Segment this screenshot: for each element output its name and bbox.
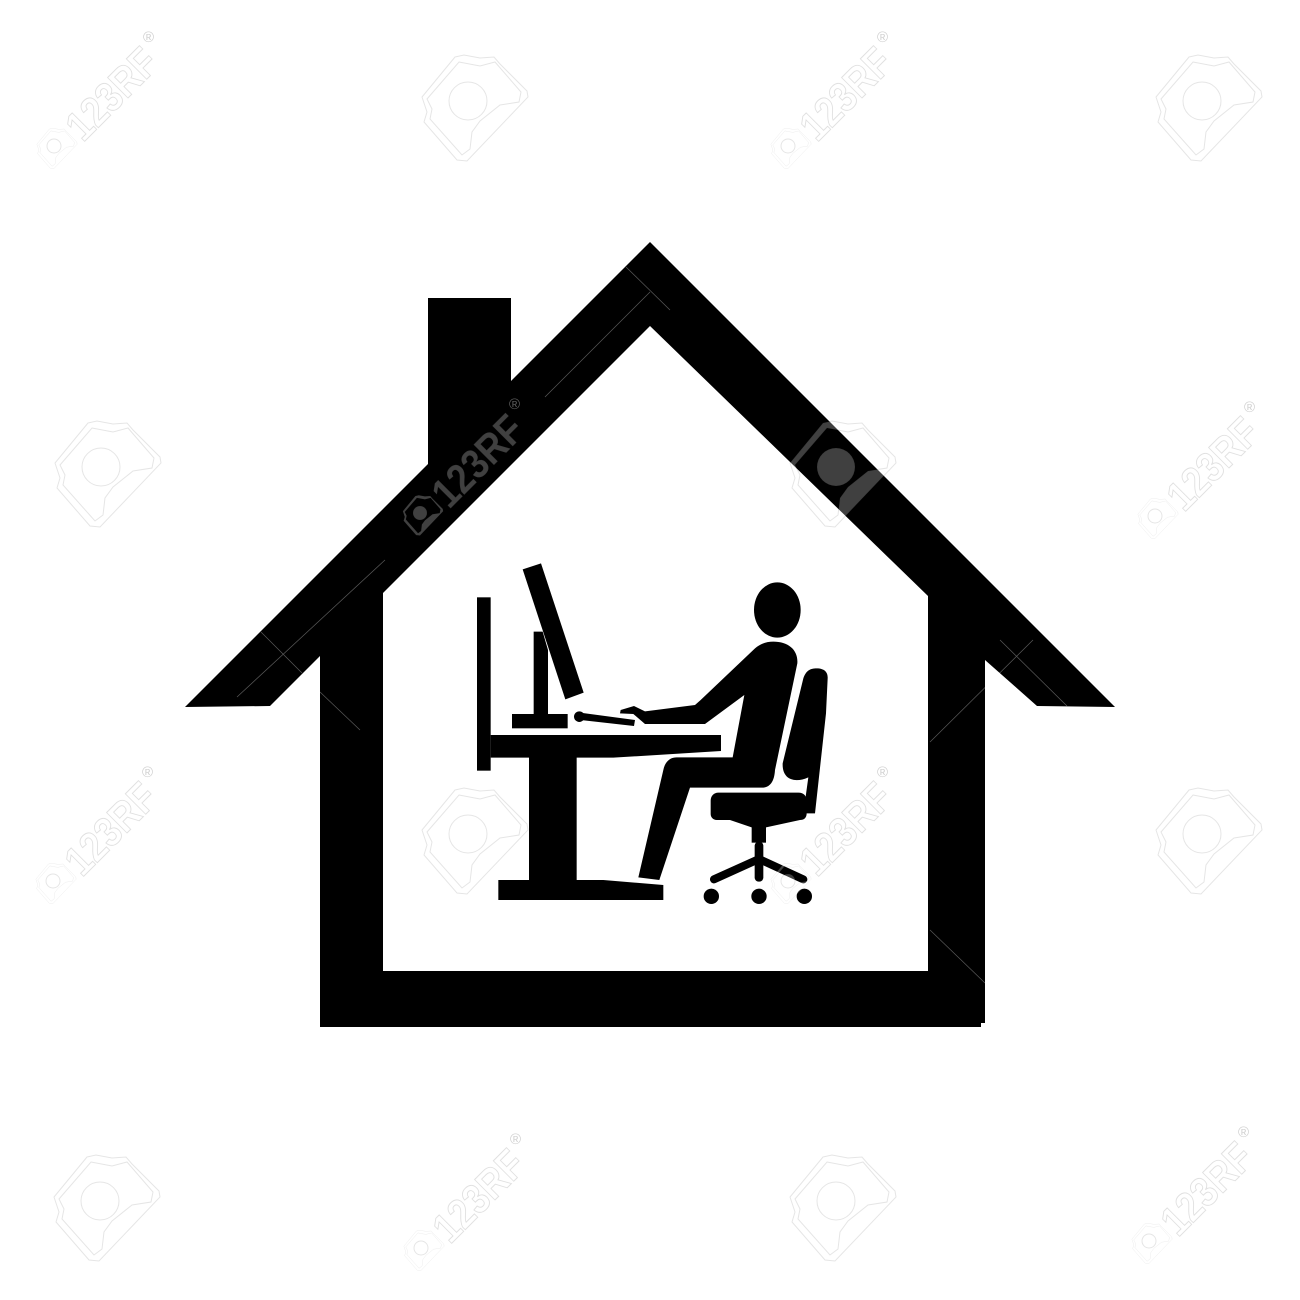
watermark: egg row 1: [422, 55, 528, 161]
person body: [620, 642, 797, 880]
watermark: logo row 3 right: ®: [877, 764, 888, 781]
watermark: logo row 3 left: [36, 764, 166, 904]
watermark: logo row 4 far right: 123RF: [1151, 1133, 1262, 1244]
watermark: logo row 2 right: 123RF: [1157, 408, 1268, 519]
watermark: logo on roof: ®: [509, 396, 520, 413]
watermark: egg row 3: [422, 788, 528, 894]
icon: house outline with chimney: [185, 242, 1115, 1027]
watermark: logo row 4 far right: [1132, 1124, 1262, 1264]
watermark: logo on roof: [403, 396, 533, 536]
watermark: logo row 1 left: [37, 29, 167, 169]
watermark: logo row 2 right: [1138, 399, 1268, 539]
office chair: [704, 668, 828, 904]
watermark: logo row 4 middle: 123RF: [423, 1140, 534, 1251]
watermark: logo row 1 right: [771, 29, 901, 169]
desk: [477, 597, 721, 900]
computer monitor: [512, 563, 584, 728]
watermark: egg on roof right: [790, 421, 896, 527]
person head: [754, 582, 801, 638]
watermark: egg row 3 far right: [1156, 788, 1262, 894]
watermark: egg row 2 left: [55, 421, 161, 527]
watermark: logo row 4 middle: ®: [510, 1131, 521, 1148]
watermark: logo row 3 right: 123RF: [790, 773, 901, 884]
watermark: logo row 4 far right: ®: [1238, 1124, 1249, 1141]
watermark: logo row 1 right: 123RF: [790, 38, 901, 149]
watermark: egg row 4 right: [790, 1155, 896, 1261]
watermark: logo row 1 right: ®: [877, 29, 888, 46]
watermark: logo row 1 left: 123RF: [56, 38, 167, 149]
watermark: logo row 3 left: ®: [142, 764, 153, 781]
icon: person working at a desk: [477, 563, 828, 904]
watermark: logo row 2 right: ®: [1244, 399, 1255, 416]
watermark: egg row 4 left: [54, 1155, 160, 1261]
watermark: logo row 3 right: [771, 764, 901, 904]
watermark: egg row 1 far right: [1156, 55, 1262, 161]
watermark: logo on roof: 123RF: [422, 405, 533, 516]
watermark: logo row 1 left: ®: [143, 29, 154, 46]
watermark: logo row 3 left: 123RF: [55, 773, 166, 884]
keyboard: [574, 711, 635, 726]
watermark: logo row 4 middle: [404, 1131, 534, 1271]
